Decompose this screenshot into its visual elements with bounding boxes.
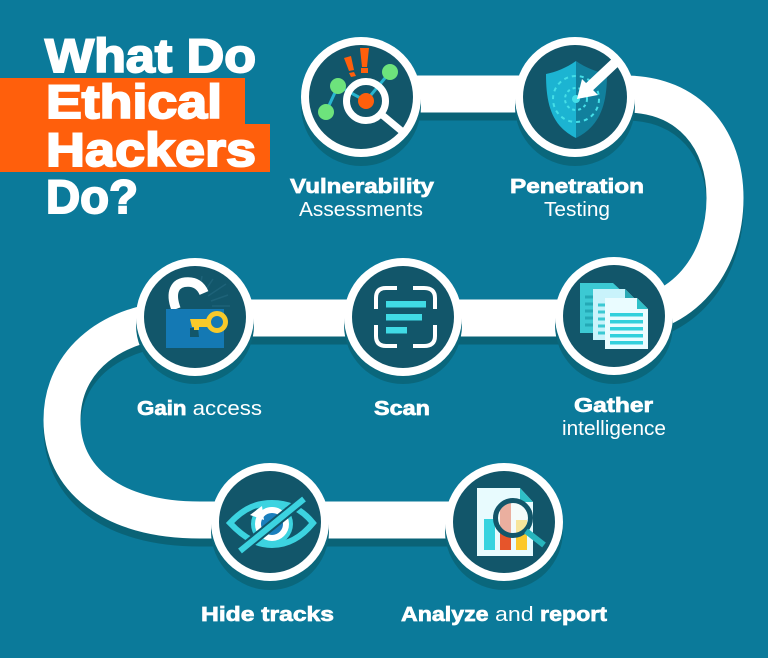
label: Hide tracks bbox=[201, 604, 334, 626]
label: intelligence bbox=[562, 418, 666, 440]
title banner: Do? bbox=[46, 170, 138, 223]
label: Gain access bbox=[137, 398, 262, 420]
label: Assessments bbox=[299, 199, 423, 221]
icon: graph under magnifier bbox=[318, 48, 404, 133]
icon: open padlock with key bbox=[166, 276, 230, 348]
winding path shadow bbox=[62, 102, 725, 528]
label: Analyze and report bbox=[401, 604, 607, 626]
title banner: Hackers bbox=[46, 123, 256, 176]
step: gather intelligence bbox=[555, 257, 673, 440]
icon: shield with arrow bbox=[546, 59, 619, 138]
label bbox=[290, 176, 435, 221]
icon: stacked documents bbox=[580, 283, 648, 349]
step: penetration testing bbox=[510, 37, 644, 221]
label: Penetration bbox=[510, 176, 644, 198]
step: vulnerability assessments bbox=[290, 37, 435, 221]
winding white path bbox=[62, 94, 725, 520]
title banner: Ethical bbox=[46, 75, 222, 128]
step: gain access bbox=[136, 258, 262, 420]
label: Testing bbox=[544, 199, 610, 221]
label: Vulnerability bbox=[290, 176, 435, 198]
icon: report with magnifier bbox=[477, 488, 544, 556]
label bbox=[562, 395, 666, 440]
step: scan bbox=[344, 258, 462, 420]
icon: crossed-out eye bbox=[230, 499, 313, 551]
label bbox=[510, 176, 644, 221]
label: Gather bbox=[574, 395, 653, 417]
title banner bbox=[0, 29, 270, 223]
icon: scan frame bbox=[376, 288, 435, 346]
label: Scan bbox=[374, 398, 430, 420]
title banner: What Do bbox=[45, 29, 256, 82]
step: analyze and report bbox=[401, 463, 607, 626]
step: hide tracks bbox=[201, 463, 334, 626]
